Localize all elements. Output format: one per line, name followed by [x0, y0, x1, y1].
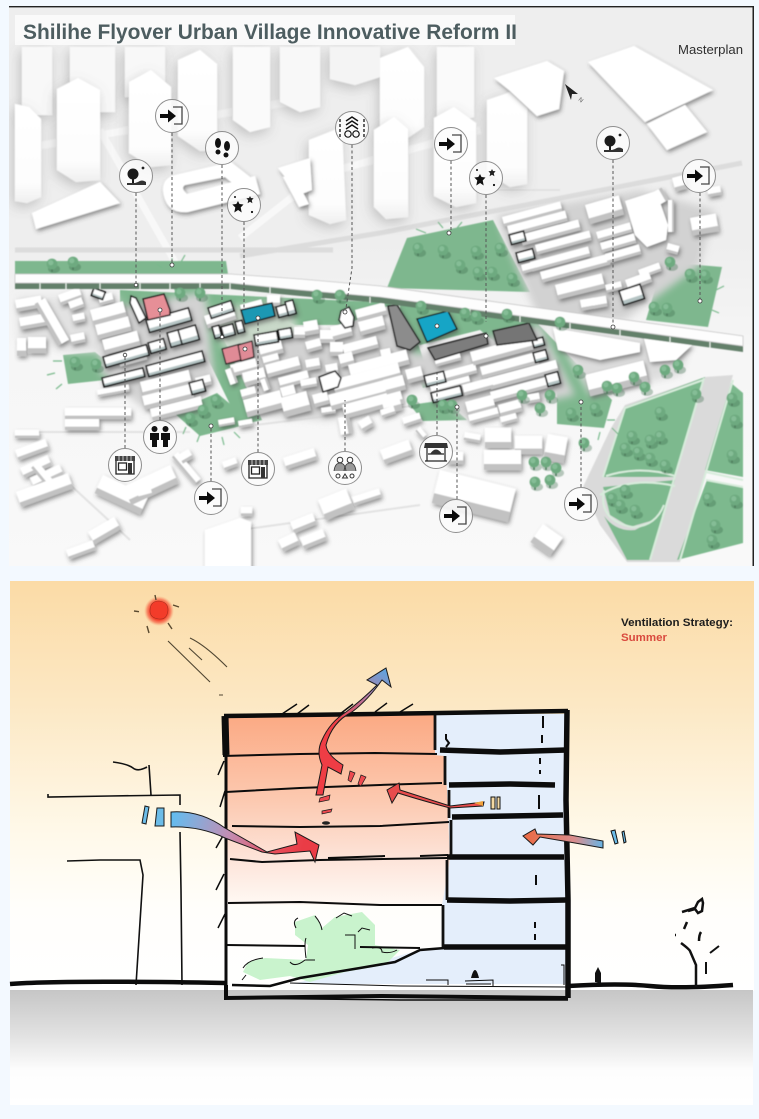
north arrow [565, 84, 584, 104]
icon: shop [108, 448, 142, 482]
icon: entrance 4 [194, 482, 228, 514]
icon: entrance 3 [682, 160, 716, 192]
grey buildings [388, 305, 420, 350]
bottom right park [583, 375, 733, 562]
title band [15, 15, 515, 45]
north arrow: N [577, 97, 584, 104]
aerial base map [15, 46, 743, 570]
green park areas [15, 220, 722, 436]
arrow: west inflow blocks [142, 806, 164, 826]
towers front row [15, 50, 527, 224]
callout leader lines [125, 133, 700, 499]
icon: children [144, 420, 176, 454]
towers back row [22, 47, 474, 144]
pink buildings [143, 294, 170, 320]
green rays [47, 222, 724, 445]
icon: park tree [120, 160, 152, 192]
icon: community [328, 452, 362, 484]
icon: cycling lane [336, 112, 368, 144]
icon: play stars [228, 188, 260, 222]
flyover [15, 274, 743, 352]
icon: entrance 6 [564, 488, 598, 520]
outer walls [216, 703, 568, 1000]
tree sketch right [675, 899, 719, 987]
panel: ventilation section [10, 581, 754, 1105]
label: masterplan: Masterplan [678, 42, 743, 57]
icon: shop 2 [242, 452, 274, 486]
icon: entrance 5 [440, 500, 472, 532]
title: Shilihe Flyover Urban Village Innovative Reform II [23, 21, 517, 44]
trees [47, 243, 743, 549]
building heat zone [225, 714, 450, 905]
label: ventilation strategy: Ventilation Strategy: [621, 617, 733, 629]
arrow: east inflow upper [387, 783, 500, 809]
village ground [18, 190, 715, 420]
icon: entrance 2 [434, 128, 468, 160]
buildings [15, 175, 721, 570]
icon: play stars 2 [470, 162, 502, 194]
low blocks upper [32, 46, 713, 229]
arrow: stack exhaust [316, 668, 391, 825]
cool side floor slabs [440, 750, 566, 947]
arrow: west inflow [171, 812, 319, 862]
ground roads [15, 100, 480, 262]
tree in atrium [242, 912, 400, 982]
ground line and slope [10, 948, 733, 987]
sun [134, 595, 227, 695]
callout anchor dots [123, 231, 702, 428]
neighbouring building sketch [48, 762, 182, 985]
arrow: east inflow lower [523, 829, 626, 848]
icon: market stall [420, 436, 452, 468]
partition wall [435, 714, 451, 947]
label: summer: Summer [621, 632, 668, 644]
people silhouettes [471, 967, 601, 983]
building cool zone [293, 714, 566, 984]
blue buildings [241, 303, 275, 324]
atrium floor lines [223, 753, 449, 948]
icon: footprints [206, 132, 238, 164]
panel: masterplan [9, 6, 754, 570]
icon: park tree 2 [596, 126, 630, 160]
icon: entrance [156, 100, 188, 132]
